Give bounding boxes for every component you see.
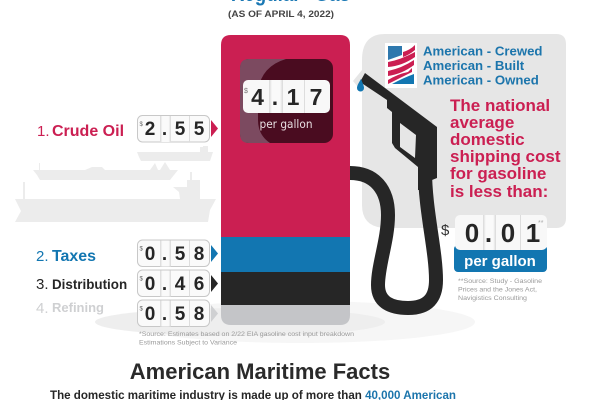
counter: 2.55: 5: [194, 119, 205, 140]
row: refining: 4.: [36, 300, 49, 317]
source note: shipping study: [458, 278, 543, 302]
counter: 0.58: 0: [145, 304, 155, 325]
counter: 0.58: 5: [175, 244, 186, 265]
row: taxes: [36, 240, 218, 266]
American crewed text: American - Crewed: [423, 44, 542, 58]
icon: fuel drop: [357, 79, 364, 92]
counter: 4.17: 7: [310, 84, 322, 110]
counter: 2.55: .: [162, 119, 167, 140]
icon: ships silhouette: [15, 146, 216, 222]
row: taxes: Taxes: [52, 248, 96, 265]
panel: shipping cost background: [353, 34, 566, 228]
counter: 0.46: 0: [145, 274, 155, 295]
pump segment: distribution: [221, 272, 350, 305]
counter: 0.01 per gallon: 0: [501, 218, 515, 248]
shipping cost callout: average: [450, 113, 514, 132]
row: crude oil: 1.: [37, 123, 50, 140]
counter: 0.58: 5: [175, 304, 186, 325]
counter: 0.01 per gallon: [441, 215, 547, 272]
row: taxes: 2.: [36, 248, 49, 265]
row: refining: [36, 300, 218, 326]
counter: 0.58: [138, 240, 210, 266]
row: crude oil: Crude Oil: [52, 123, 124, 140]
icon: American flag: [385, 43, 417, 88]
row: refining: Refining: [52, 300, 104, 315]
counter: 4.17: 4: [251, 84, 264, 110]
counter: 0.46: $: [140, 276, 144, 282]
shipping cost callout: [450, 96, 561, 201]
counter: 4.17: 1: [287, 84, 300, 110]
counter: 4.17: $: [244, 88, 248, 95]
date subtitle: (AS OF APRIL 4, 2022): [228, 9, 334, 19]
source note: cost breakdown: [139, 331, 355, 346]
counter: 2.55: $: [140, 122, 144, 128]
counter: 0.01 per gallon: **: [538, 220, 544, 227]
pump segment: crude oil: [221, 35, 350, 237]
pump price display: [240, 59, 333, 143]
source note: shipping study: Navigistics Consulting: [458, 295, 528, 302]
icon: fuel nozzle: [360, 73, 437, 190]
American crewed text: American - Built: [423, 58, 525, 73]
counter: 0.01 per gallon: .: [485, 218, 492, 248]
shipping cost callout: for gasoline: [450, 164, 546, 183]
per gallon label: per gallon: [260, 117, 312, 131]
counter: 0.58: 8: [194, 244, 204, 265]
row: crude oil: [37, 116, 218, 142]
source note: cost breakdown: Estimations Subject to Variance: [139, 340, 238, 346]
gas pump: [221, 35, 350, 325]
shipping cost callout: domestic: [450, 130, 525, 149]
counter: 0.01 per gallon: $: [441, 222, 450, 239]
per gallon bar: [454, 245, 547, 272]
counter: 2.55: [138, 116, 210, 142]
counter: 0.58: .: [162, 244, 167, 265]
shipping cost callout: is less than:: [450, 182, 548, 201]
counter: 0.46: .: [162, 274, 167, 295]
shipping cost callout: The national: [450, 96, 550, 115]
counter: 0.58: $: [140, 246, 144, 252]
counter: 0.46: 6: [194, 274, 204, 295]
pump segment: refining: [221, 305, 350, 325]
floor shadow: [95, 301, 475, 343]
source note: cost breakdown: *Source: Estimates based on 2/22 EIA gasoline cost input breakdown: [139, 331, 355, 338]
counter: 2.55: 5: [175, 119, 186, 140]
row: distribution: Distribution: [52, 277, 127, 292]
counter: 0.01 per gallon: per gallon: [464, 253, 536, 270]
counter: 0.01 per gallon: 0: [465, 218, 479, 248]
counter: 0.46: [138, 270, 210, 296]
counter: 0.58: [138, 300, 210, 326]
heading: American Maritime Facts: American Maritime Facts: [130, 359, 390, 384]
icon: hose: [350, 170, 436, 308]
American crewed text: American - Owned: [423, 72, 539, 88]
source note: shipping study: Prices and the Jones Act,: [458, 286, 537, 294]
counter: 0.58: .: [162, 304, 167, 325]
pump segment: taxes: [221, 237, 350, 272]
counter: 4.17: .: [272, 84, 278, 110]
counter: 0.58: 0: [145, 244, 155, 265]
counter: 0.58: $: [140, 306, 144, 312]
source note: shipping study: **Source: Study - Gasoline: [458, 278, 543, 285]
counter: 0.01 per gallon: 1: [526, 218, 540, 248]
American crewed text: [423, 44, 542, 88]
row: distribution: 3.: [36, 276, 49, 293]
counter: 2.55: 2: [145, 119, 155, 140]
counter: 0.58: 8: [194, 304, 204, 325]
counter: 4.17: [243, 80, 330, 113]
shipping cost callout: shipping cost: [450, 147, 561, 166]
counter: 0.46: 4: [175, 274, 186, 295]
row: distribution: [36, 270, 218, 296]
